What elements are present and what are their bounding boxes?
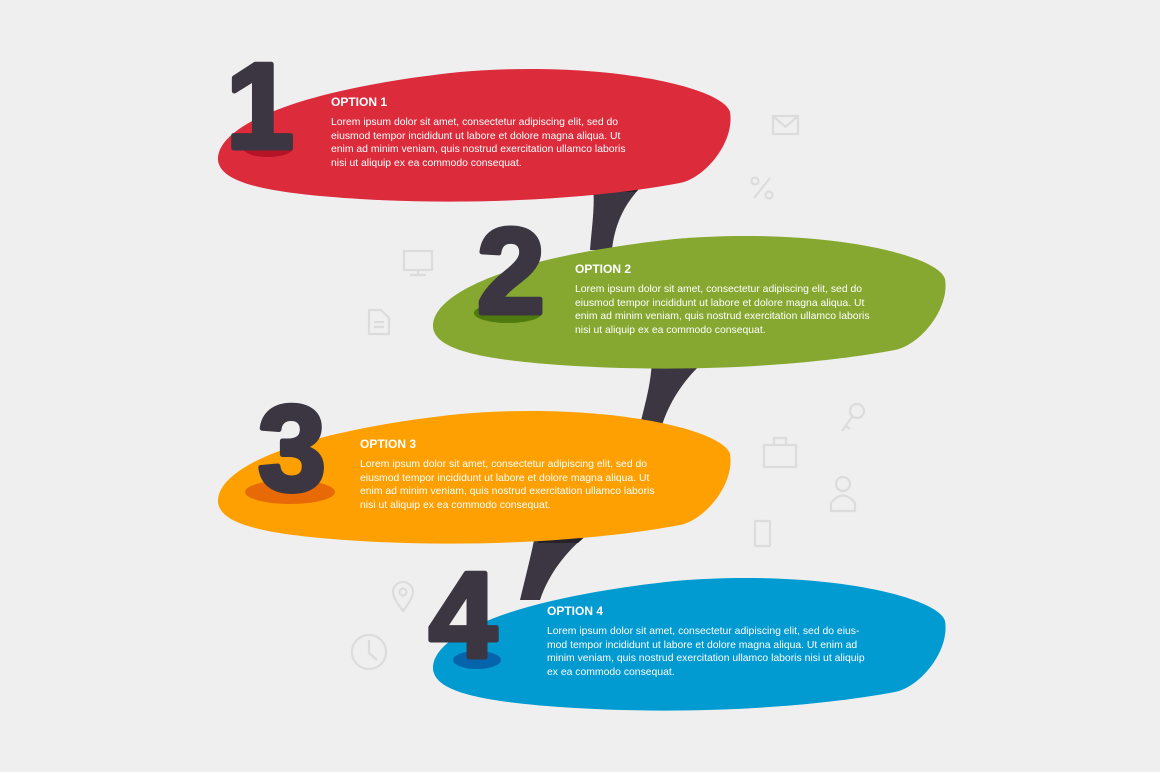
hole 4 — [453, 651, 501, 669]
hole 2 — [474, 303, 542, 323]
icon: percent — [752, 178, 772, 198]
icon: phone — [755, 521, 770, 546]
connector 1-2 — [590, 180, 648, 250]
body 4: minim veniam, quis nostrud exercitation ullamco laboris nisi ut aliquip — [547, 653, 865, 664]
number 1: 1 — [226, 38, 294, 174]
number 3: 3 — [258, 380, 326, 516]
connector 3-4 — [520, 530, 592, 600]
title 1: OPTION 1 — [331, 95, 387, 109]
title 2: OPTION 2 — [575, 262, 631, 276]
body 4: Lorem ipsum dolor sit amet, consectetur adipiscing elit, sed do eius- — [547, 626, 859, 637]
panel: option 1 — [218, 38, 731, 202]
icon: envelope — [773, 116, 798, 134]
body 1: Lorem ipsum dolor sit amet, consectetur adipiscing elit, sed do — [331, 117, 618, 128]
body 3: Lorem ipsum dolor sit amet, consectetur adipiscing elit, sed do — [360, 459, 647, 470]
body 2: nisi ut aliquip ex ea commodo consequat. — [575, 325, 766, 336]
icon: clock — [352, 635, 386, 669]
body 3: nisi ut aliquip ex ea commodo consequat. — [360, 500, 551, 511]
body 2: enim ad minim veniam, quis nostrud exercitation ullamco laboris — [575, 311, 870, 322]
icon: briefcase — [764, 438, 796, 467]
title 4: OPTION 4 — [547, 604, 603, 618]
hole 1 — [243, 139, 293, 157]
body 3: eiusmod tempor incididunt ut labore et dolore magna aliqua. Ut — [360, 473, 649, 484]
body 2: Lorem ipsum dolor sit amet, consectetur adipiscing elit, sed do — [575, 284, 862, 295]
number 2: 2 — [477, 203, 545, 339]
panel: option 4 — [429, 547, 946, 711]
number 4: 4 — [429, 547, 497, 683]
body 1: enim ad minim veniam, quis nostrud exercitation ullamco laboris — [331, 144, 626, 155]
body 4: ex ea commodo consequat. — [547, 667, 675, 678]
hole 3 — [245, 480, 335, 504]
body 4: mod tempor incididunt ut labore et dolore magna aliqua. Ut enim ad — [547, 640, 857, 651]
panel: option 2 — [433, 203, 946, 369]
title 3: OPTION 3 — [360, 437, 416, 451]
body 1: eiusmod tempor incididunt ut labore et dolore magna aliqua. Ut — [331, 131, 620, 142]
panel: option 3 — [218, 380, 731, 544]
icon: monitor — [404, 251, 432, 275]
icon: key — [842, 404, 864, 431]
body 2: eiusmod tempor incididunt ut labore et dolore magna aliqua. Ut — [575, 298, 864, 309]
icon: person — [831, 477, 855, 511]
icon: document — [369, 310, 389, 334]
connector 2-3 — [640, 355, 712, 425]
icon: map pin — [393, 582, 413, 611]
body 3: enim ad minim veniam, quis nostrud exercitation ullamco laboris — [360, 486, 655, 497]
body 1: nisi ut aliquip ex ea commodo consequat. — [331, 158, 522, 169]
